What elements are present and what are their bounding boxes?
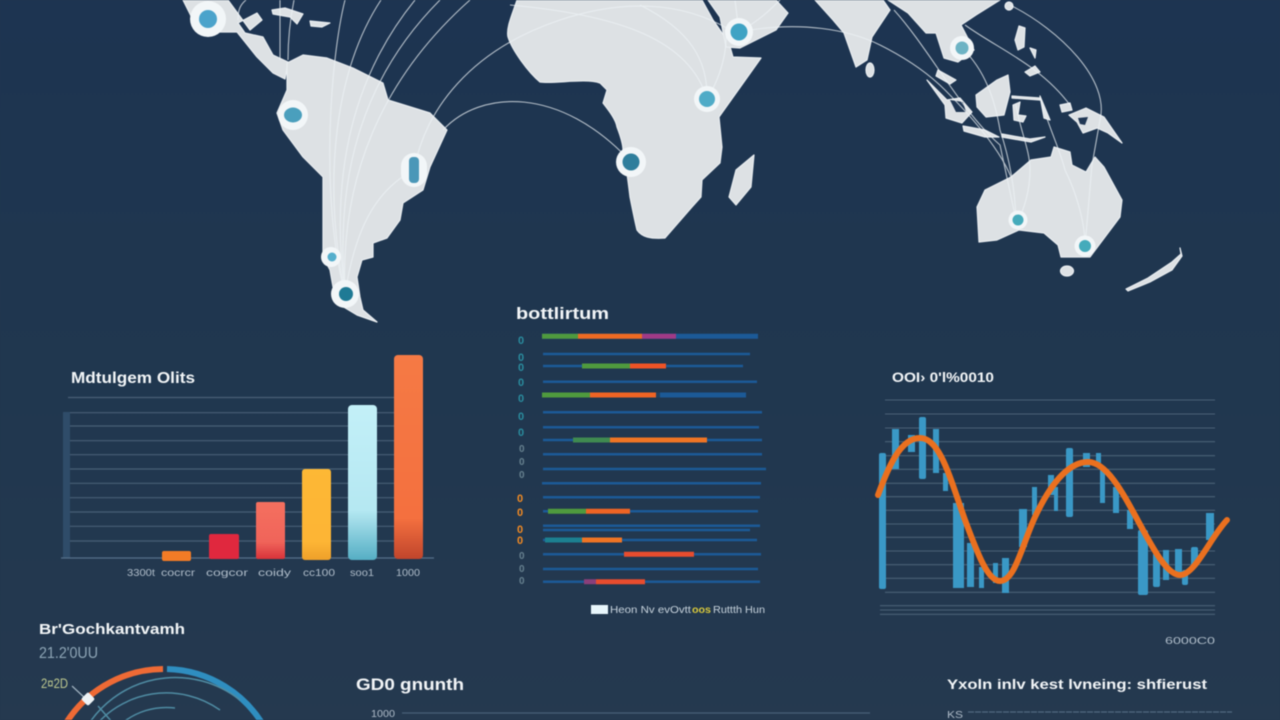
inner arcs	[85, 677, 240, 720]
callout leader	[72, 686, 86, 699]
orange trend line	[878, 438, 1227, 581]
gantt legend: oos	[692, 605, 711, 616]
connection arcs	[238, 0, 1101, 294]
marker: Mexico	[190, 1, 226, 37]
gantt legend: Ruttth Hun	[713, 605, 765, 616]
bar chart title: Mdtulgem Olits	[71, 370, 195, 387]
blue arc	[167, 669, 266, 720]
gantt row labels	[517, 335, 525, 587]
Australia	[977, 147, 1122, 257]
orange arc	[62, 669, 163, 720]
line chart axis label: 6000C0	[1165, 636, 1216, 647]
Philippines	[1015, 26, 1072, 112]
gantt title: bottlirtum	[516, 304, 609, 323]
Borneo	[976, 75, 1010, 117]
gantt row labels: 0	[518, 335, 524, 347]
gantt row labels: 0	[518, 352, 524, 364]
callout diamond	[81, 692, 95, 706]
East and southeast Asia	[888, 0, 1000, 62]
New Guinea	[1069, 108, 1122, 143]
marker: Patagonia	[331, 280, 359, 308]
India and south Asia	[815, 0, 890, 67]
Java and Sunda islands	[963, 126, 1045, 142]
gantt legend: Heon Nv evOvtt	[610, 605, 691, 616]
blue columns	[879, 417, 1214, 595]
marker: East Africa	[694, 86, 720, 112]
Sulawesi	[1012, 96, 1050, 122]
bar axis labels: coidy	[258, 568, 291, 579]
South America	[277, 55, 447, 322]
panel: gantt chart	[516, 304, 766, 616]
panel: bottom right chart	[947, 676, 1232, 720]
gantt row labels: 0	[519, 576, 525, 587]
New Zealand	[1126, 248, 1182, 291]
marker: Chile	[321, 247, 341, 267]
gantt row labels: 0	[518, 427, 524, 439]
panel: bar chart	[61, 355, 434, 579]
gantt row labels: 0	[518, 362, 524, 374]
bars	[162, 355, 423, 561]
gantt row labels: 0	[517, 507, 523, 519]
gantt row labels: 0	[517, 535, 523, 547]
Central America	[183, 0, 288, 79]
gantt row labels: 0	[517, 493, 523, 505]
bar axis labels: 3300t	[127, 568, 155, 579]
GDP axis label: 1000	[371, 709, 395, 720]
bar axis labels: soo1	[350, 568, 374, 579]
marker: South Africa	[616, 147, 646, 177]
Africa	[508, 0, 761, 238]
gantt row labels: 0	[519, 564, 525, 575]
Japan fragment	[1005, 2, 1013, 10]
bar axis labels: cocrcr	[161, 568, 196, 579]
line chart title: OOI› 0'l%0010	[892, 369, 994, 385]
land masses	[183, 0, 1182, 322]
bar axis labels: cc100	[303, 568, 336, 579]
gantt row labels: 0	[519, 444, 525, 455]
gantt segments	[542, 336, 707, 582]
panel: line and column chart	[878, 369, 1227, 647]
gantt row labels: 0	[519, 457, 525, 468]
y axis band	[63, 412, 70, 558]
marker: Western Australia	[1008, 210, 1028, 230]
marker: Peru	[278, 100, 308, 130]
Arabian peninsula	[708, 0, 788, 48]
location markers	[190, 1, 1096, 308]
gantt row labels: 0	[519, 470, 525, 481]
bar axis labels: 1000	[396, 568, 420, 579]
Madagascar	[729, 155, 754, 205]
Malay and Sumatra	[927, 70, 972, 123]
marker: Eastern Australia	[1074, 236, 1096, 256]
bar axis labels: cogcor	[206, 568, 249, 579]
bar axis labels	[127, 568, 420, 579]
gantt rows	[542, 336, 766, 582]
gantt row labels: 0	[517, 524, 523, 536]
gauge title: Br'Gochkantvamh	[39, 621, 185, 638]
Sri Lanka	[866, 63, 874, 77]
GDP title: GD0 gnunth	[356, 675, 464, 694]
gantt row labels: 0	[518, 377, 524, 389]
gauge value: 21.2'0UU	[39, 645, 98, 662]
dark inlets in southeast Asia	[950, 100, 1088, 125]
marker: Southeast Asia	[950, 36, 974, 60]
panel: GDP growth	[356, 675, 870, 720]
world map with connection arcs	[183, 0, 1182, 322]
marker: Brazil	[401, 153, 427, 187]
gantt row labels: 0	[519, 551, 525, 562]
gauge callout label: 2¤2D	[41, 675, 68, 691]
Tasmania	[1060, 266, 1074, 276]
gantt row labels: 0	[518, 393, 524, 405]
bottom right title: Yxoln inlv kest lvneing: shfierust	[947, 676, 1207, 692]
gantt legend	[591, 605, 765, 616]
panel: donut gauge	[39, 621, 266, 720]
gantt row labels: 0	[518, 411, 524, 423]
Caribbean islands	[272, 8, 330, 27]
marker: Arabia	[725, 18, 753, 46]
